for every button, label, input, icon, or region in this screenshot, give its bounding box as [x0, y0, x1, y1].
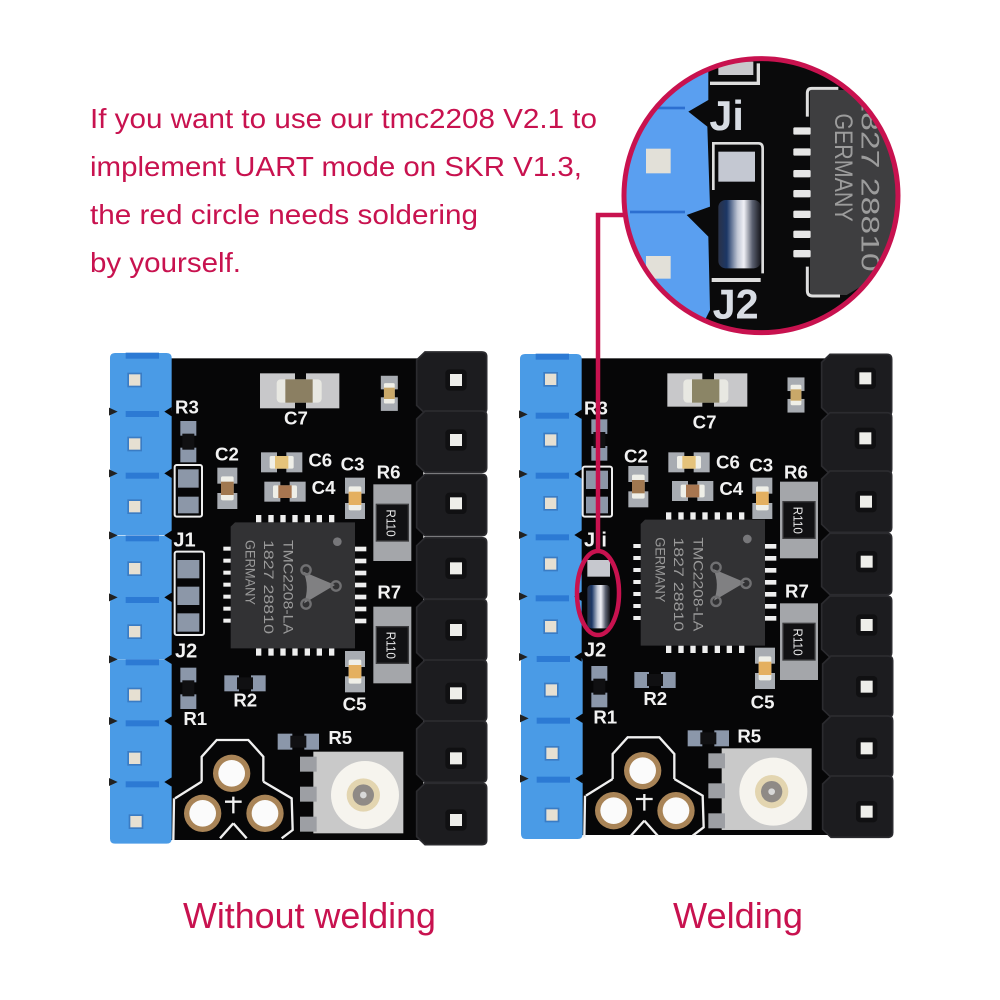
- blue header pins: [109, 353, 172, 844]
- chip: TMC2208-LA: [280, 540, 296, 635]
- silkscreen labels: C4: [312, 477, 336, 498]
- instruction text: If you want to use our tmc2208 V2.1 to: [90, 103, 597, 134]
- power terminal footprint: [173, 740, 293, 840]
- silkscreen labels: R1: [593, 706, 617, 727]
- silkscreen labels: [173, 396, 401, 748]
- callout: magnified solder joint: 1827 28810: [856, 93, 884, 272]
- trimmer potentiometer: [300, 752, 403, 833]
- silkscreen labels: C6: [716, 451, 740, 472]
- silkscreen labels: C5: [751, 691, 775, 712]
- chip: [633, 512, 776, 653]
- components: R110: [384, 632, 398, 659]
- callout: magnified solder joint: Ji: [709, 93, 744, 139]
- black header pins: [417, 352, 487, 845]
- silkscreen labels: R6: [377, 461, 401, 482]
- silkscreen labels: C7: [693, 411, 717, 432]
- black header pins: [822, 354, 893, 837]
- silkscreen labels: C2: [215, 444, 239, 465]
- silkscreen labels: J2: [175, 640, 197, 662]
- silkscreen labels: J1: [173, 530, 196, 552]
- chip: GERMANY: [653, 537, 669, 603]
- silkscreen labels: C6: [308, 450, 332, 471]
- callout: magnified solder joint: J2: [713, 281, 759, 327]
- silkscreen labels: R1: [183, 708, 207, 729]
- instruction text: the red circle needs soldering: [90, 199, 478, 230]
- components: R110: [790, 507, 804, 534]
- silkscreen labels: R5: [328, 727, 352, 748]
- silkscreen labels: R7: [377, 581, 401, 602]
- chip: GERMANY: [243, 540, 259, 606]
- caption: without welding: Without welding: [183, 895, 436, 936]
- components: [583, 373, 818, 746]
- silkscreen labels: C5: [343, 694, 367, 715]
- silkscreen labels: i: [601, 530, 607, 552]
- chip: 1827 28810: [671, 537, 687, 632]
- silkscreen labels: J2: [584, 640, 606, 662]
- blue header pins: [519, 354, 583, 839]
- panel: board with welding: [519, 354, 893, 839]
- trimmer potentiometer: [708, 748, 812, 830]
- silkscreen labels: R6: [784, 461, 808, 482]
- panel: board without welding: [109, 352, 487, 845]
- instruction text: by yourself.: [90, 247, 241, 278]
- callout: magnified solder joint: [620, 57, 903, 337]
- silkscreen labels: R5: [737, 726, 761, 747]
- power terminal footprint: [584, 737, 704, 837]
- components: R110: [790, 628, 804, 656]
- components: R110: [384, 509, 398, 537]
- silkscreen labels: R7: [785, 580, 809, 601]
- silkscreen labels: R2: [643, 688, 667, 709]
- silkscreen labels: [584, 398, 809, 747]
- chip: [223, 515, 366, 656]
- components: [175, 373, 411, 750]
- callout: red circle on solder joint: [577, 551, 619, 635]
- callout: magnified solder joint: GERMANY: [829, 113, 857, 222]
- silkscreen labels: C2: [624, 446, 648, 467]
- silkscreen labels: C3: [749, 455, 773, 476]
- silkscreen labels: R2: [233, 690, 257, 711]
- silkscreen labels: R3: [584, 398, 608, 419]
- chip: TMC2208-LA: [690, 537, 706, 632]
- silkscreen labels: C4: [719, 478, 744, 499]
- silkscreen labels: R3: [175, 396, 199, 417]
- caption: welding: Welding: [673, 895, 803, 936]
- silkscreen labels: C7: [284, 408, 308, 429]
- instruction text: implement UART mode on SKR V1.3,: [90, 151, 582, 182]
- silkscreen labels: C3: [341, 454, 365, 475]
- instruction text: [90, 103, 597, 278]
- chip: 1827 28810: [261, 540, 277, 634]
- callout: connector line: [598, 215, 625, 552]
- silkscreen labels: J: [584, 530, 595, 552]
